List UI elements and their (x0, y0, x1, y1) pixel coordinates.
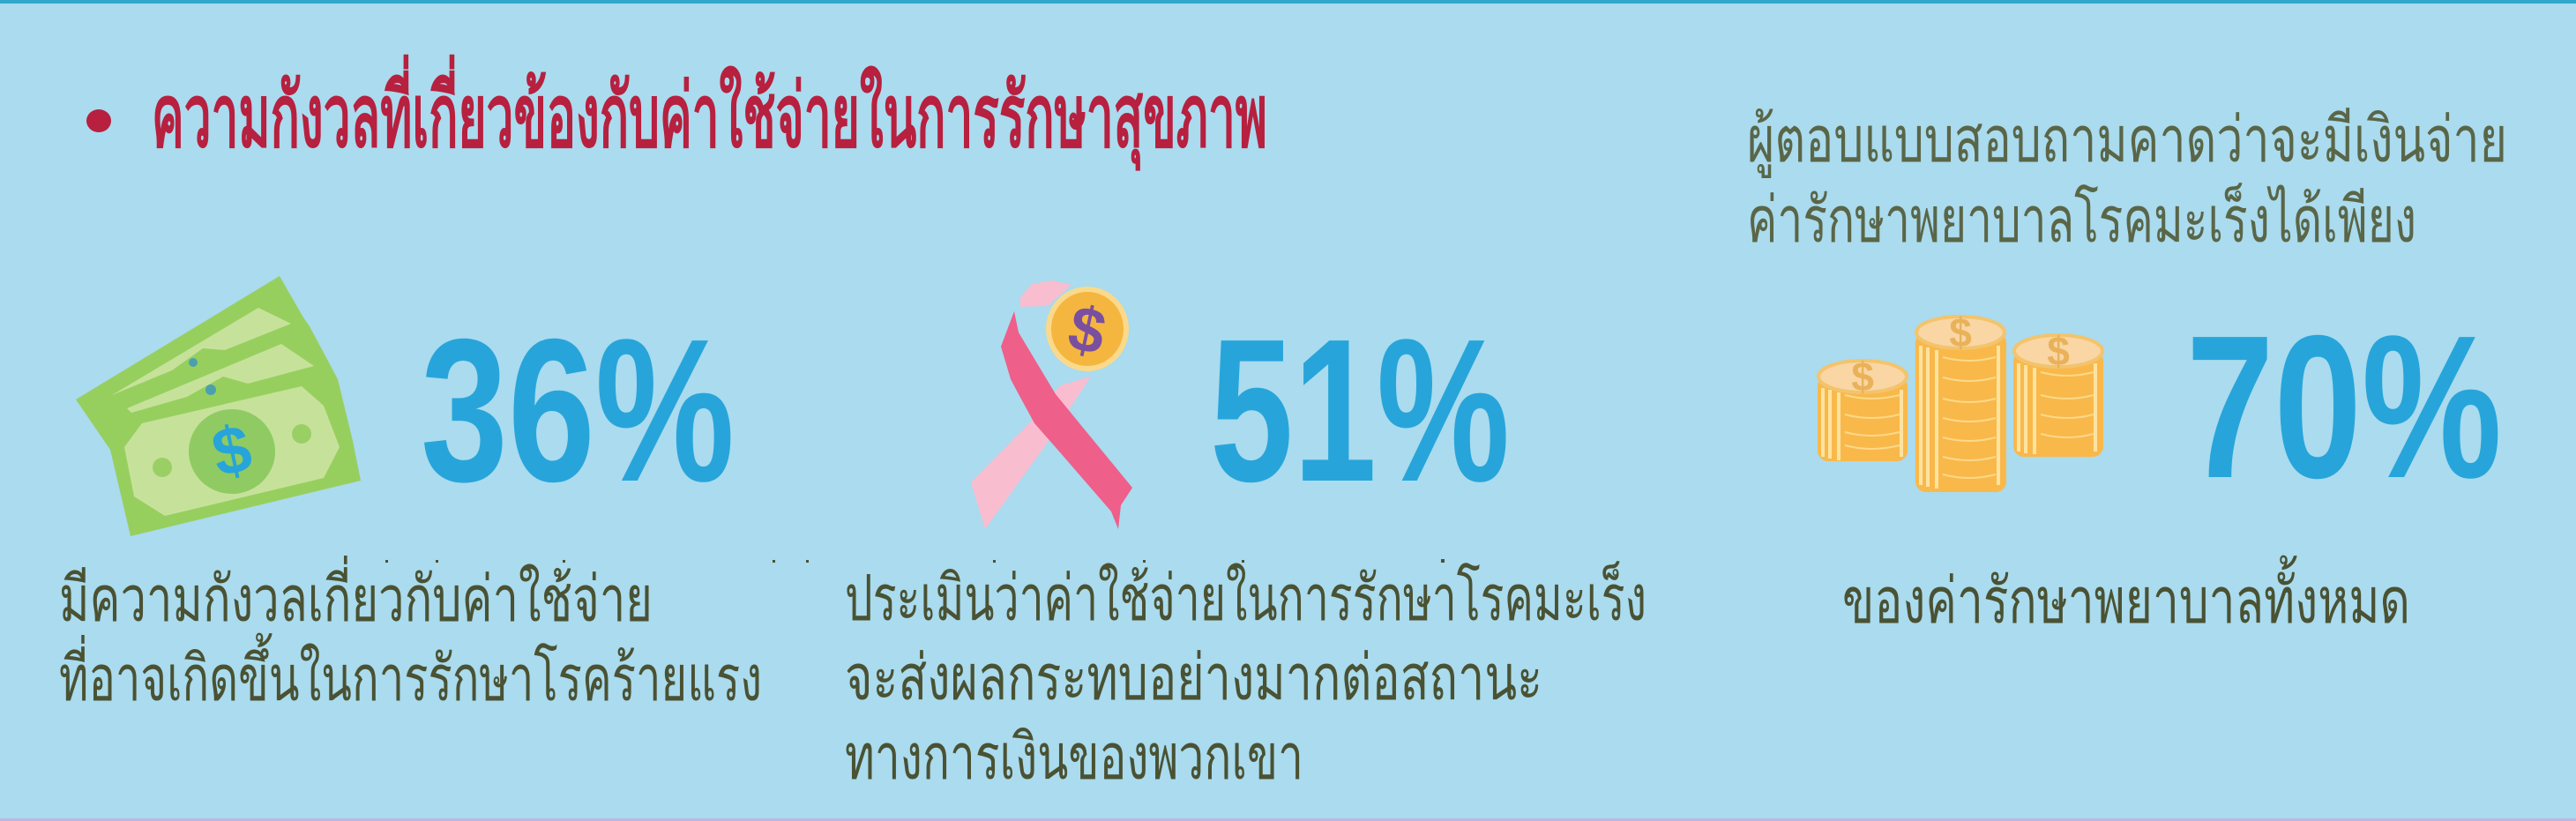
icon: ribbon with coin: $ (1063, 293, 1111, 369)
icon: banknotes (76, 276, 361, 536)
text block: respondents expectation (1747, 105, 2507, 256)
coin stack: middle: $ (1949, 310, 1972, 355)
coin stack: middle (1915, 310, 2006, 492)
stat: 36%: 36% (421, 296, 735, 524)
icon: coin stacks (1818, 310, 2103, 492)
stat: 51%: 51% (1210, 296, 1510, 524)
icon: ribbon with coin (971, 280, 1132, 529)
icon: banknotes: $ (205, 411, 258, 491)
coin stack: right: $ (2047, 328, 2070, 374)
coin stack: left (1818, 354, 1908, 461)
title heading with bullet: ความกังวลที่เกี่ยวข้องกับค่าใช้จ่ายในการรักษาสุขภาพ (152, 54, 1267, 171)
coin stack: right (2013, 328, 2103, 457)
text block: financial impact: ประเมินว่าค่าใช้จ่ายในการรักษาโรคมะเร็ง (845, 561, 1646, 634)
title heading with bullet (86, 54, 1267, 171)
text block: financial impact (845, 561, 1646, 793)
text block: worry about costs (59, 556, 762, 714)
text block: worry about costs: ที่อาจเกิดขึ้นในการรักษาโรคร้ายแรง (59, 632, 762, 714)
text block: financial impact: ทางการเงินของพวกเขา (845, 722, 1303, 793)
text block: worry about costs: มีความกังวลเกี่ยวกับค่าใช้จ่าย (59, 556, 653, 635)
text block: financial impact: จะส่งผลกระทบอย่างมากต่อสถานะ (845, 643, 1542, 713)
coin stack: left: $ (1851, 354, 1874, 399)
